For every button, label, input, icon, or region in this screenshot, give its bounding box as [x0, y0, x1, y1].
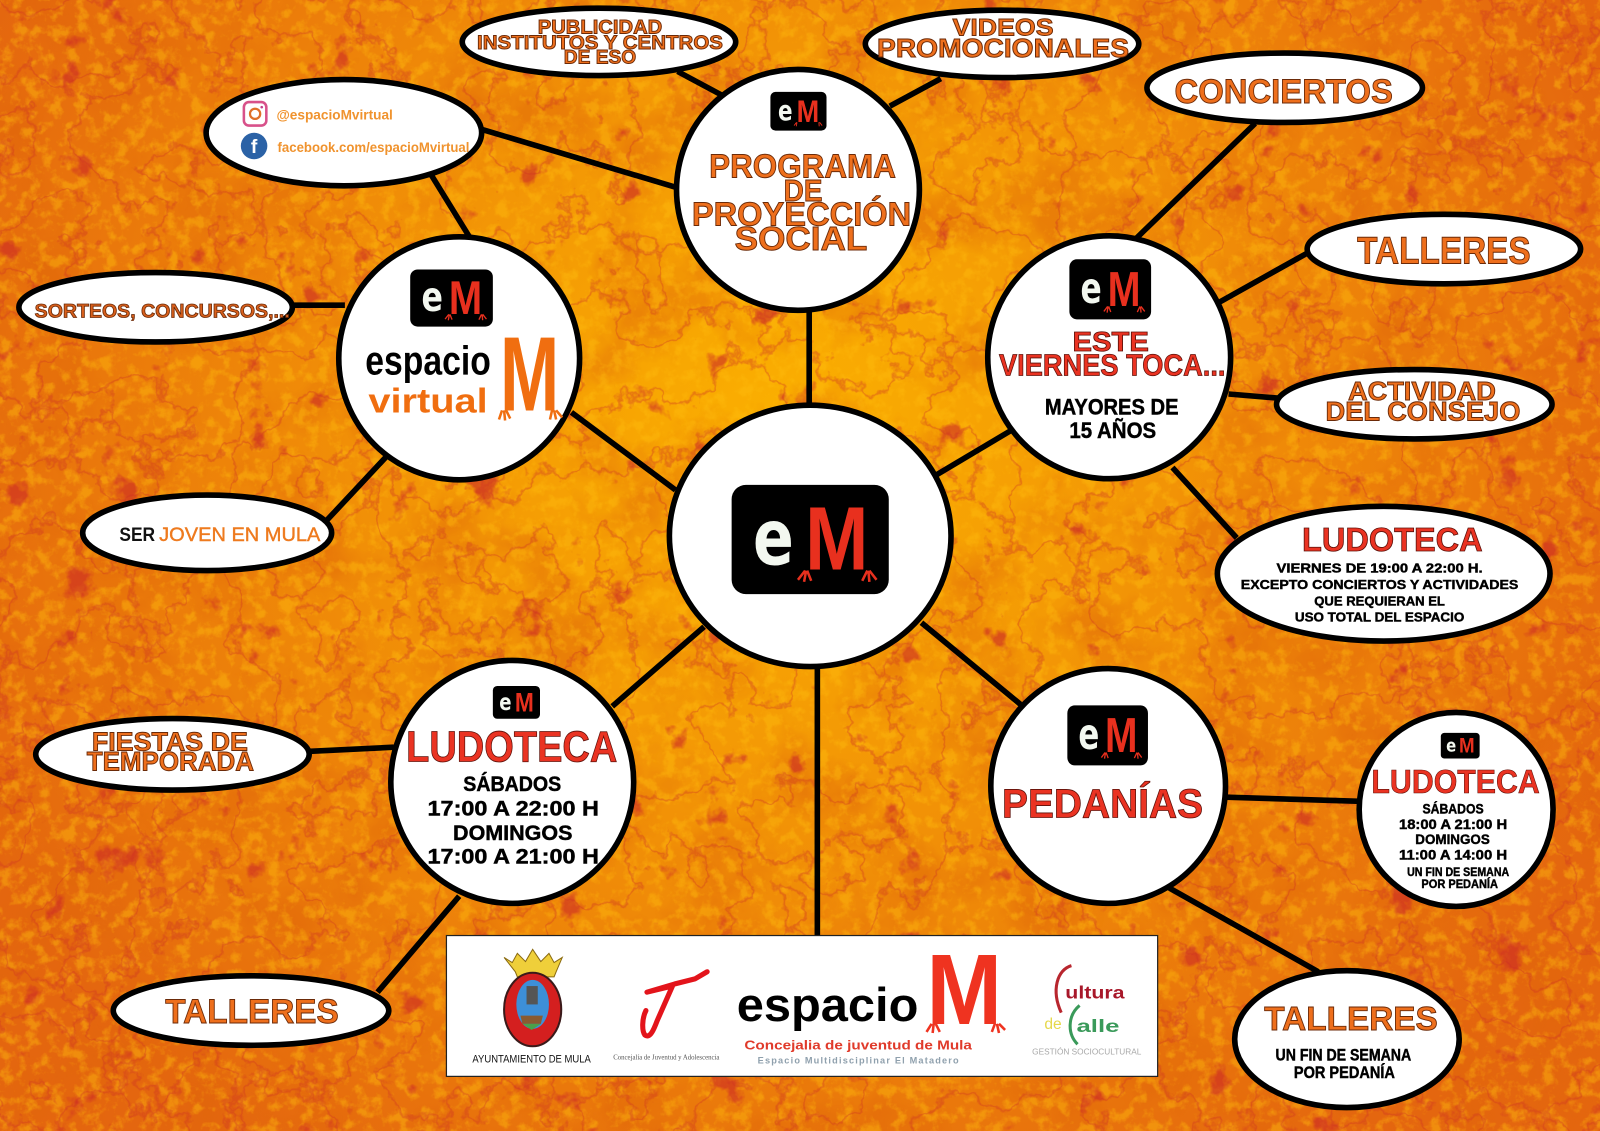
age note: MAYORES DE	[1045, 394, 1179, 419]
title: SOCIAL	[735, 221, 867, 258]
schedule: POR PEDANÍA	[1421, 876, 1498, 891]
logo: eM: e	[753, 493, 794, 583]
logo: eM: M	[1459, 733, 1475, 758]
schedule	[428, 771, 599, 869]
bubble: fiestas de temporada: TEMPORADA	[87, 747, 254, 777]
bubble: conciertos	[1147, 53, 1422, 122]
icon: red J	[643, 972, 707, 1036]
logo: eM	[410, 269, 493, 327]
schedule: UN FIN DE SEMANA	[1407, 865, 1509, 879]
logo: eM: e	[1081, 263, 1102, 313]
bubble: videos promocionales: VIDEOS	[953, 15, 1054, 42]
schedule: DOMINGOS	[1415, 832, 1490, 848]
bubble: talleres bottom left: TALLERES	[165, 993, 339, 1031]
wordmark: M: M	[500, 315, 559, 433]
title: VIERNES TOCA...	[999, 349, 1226, 383]
node: ludoteca	[391, 660, 634, 903]
title: ESTE	[1072, 326, 1149, 357]
line: ludoteca to fiestas	[310, 747, 394, 751]
title	[692, 149, 911, 258]
title: PROYECCIÓN	[692, 196, 911, 234]
title	[999, 326, 1226, 383]
logo: eM	[493, 686, 540, 719]
bubble: talleres pedanias	[1235, 971, 1459, 1108]
schedule: EXCEPTO CONCIERTOS Y ACTIVIDADES	[1241, 577, 1519, 592]
wordmark: espacio: espacio	[365, 338, 491, 384]
bubble: sorteos: SORTEOS, CONCURSOS,...	[35, 300, 290, 322]
schedule: 18:00 A 21:00 H	[1399, 817, 1507, 833]
line: centre to pedanias	[921, 623, 1020, 704]
schedule: QUE REQUIERAN EL	[1314, 593, 1445, 608]
bubble: publicidad	[462, 8, 736, 76]
wordmark: espacio M: M	[927, 934, 1002, 1046]
note	[1276, 1047, 1411, 1082]
logo: eM	[770, 92, 827, 131]
age note: 15 AÑOS	[1069, 418, 1156, 443]
bubble: talleres top right: TALLERES	[1357, 230, 1531, 272]
line: viernes to conciertos	[1137, 124, 1255, 238]
bubble: ser joven en mula	[83, 495, 332, 571]
schedule: SÁBADOS	[1422, 801, 1484, 818]
bubble: publicidad: INSTITUTOS Y CENTROS	[477, 32, 723, 54]
logo: cultura de calle: alle	[1077, 1016, 1120, 1036]
icon: facebook: f	[251, 136, 258, 158]
bubble: ludoteca viernes: LUDOTECA	[1302, 522, 1483, 559]
bubble: actividad del consejo: DEL CONSEJO	[1326, 397, 1520, 427]
schedule	[1241, 561, 1519, 625]
wordmark: espacio M	[737, 934, 1005, 1046]
facebook address: facebook.com/espacioMvirtual	[278, 140, 469, 156]
logo: eM: M	[1108, 262, 1140, 317]
line: virtual to social networks	[432, 176, 469, 237]
instagram handle: @espacioMvirtual	[277, 107, 393, 123]
logo: eM: e	[778, 94, 793, 127]
note: POR PEDANÍA	[1294, 1063, 1395, 1082]
bubble: videos promocionales: PROMOCIONALES	[877, 35, 1129, 63]
bubble: ludoteca viernes	[1217, 506, 1550, 641]
bubble: actividad del consejo: ACTIVIDAD	[1348, 378, 1496, 406]
bubble: videos promocionales	[865, 10, 1139, 78]
note: UN FIN DE SEMANA	[1276, 1047, 1411, 1065]
line: viernes to actividad	[1229, 394, 1278, 398]
logo: eM: e	[421, 273, 443, 321]
logo: cultura de calle: ultura	[1065, 982, 1125, 1002]
bubble: talleres top right	[1307, 214, 1581, 284]
wordmark: virtual: virtual	[368, 382, 488, 420]
node: este viernes toca	[988, 236, 1231, 479]
schedule: 17:00 A 21:00 H	[428, 845, 599, 869]
line: centre to programa	[806, 310, 812, 405]
line: ludoteca to talleres	[378, 896, 459, 992]
line: programa to publicidad	[678, 71, 721, 95]
subtitle: concejalia de juventud: Concejalia de juventud de Mula	[744, 1037, 973, 1052]
bubble: publicidad: PUBLICIDAD	[538, 17, 662, 39]
age note	[1045, 394, 1179, 443]
schedule: SÁBADOS	[463, 771, 561, 796]
title: PROGRAMA	[709, 149, 896, 186]
logo: eM	[1067, 705, 1148, 765]
line: virtual to sorteos	[294, 302, 345, 308]
node: programa de proyeccion social	[677, 69, 919, 310]
line: centre to ludoteca	[612, 627, 704, 706]
bubble: ser joven en mula: JOVEN EN MULA	[159, 524, 320, 546]
icon: instagram	[244, 102, 266, 126]
subtitle: espacio multidisciplinar: Espacio Multidisciplinar El Matadero	[758, 1056, 959, 1066]
caption: ayuntamiento: AYUNTAMIENTO DE MULA	[472, 1054, 592, 1066]
node: ludoteca pedanias	[1359, 712, 1553, 906]
node: espacio virtual	[339, 237, 580, 480]
icon: facebook	[241, 133, 267, 159]
logo: eM: M	[1105, 708, 1137, 763]
schedule: 11:00 A 14:00 H	[1399, 847, 1507, 863]
logo: eM	[732, 485, 889, 594]
schedule: USO TOTAL DEL ESPACIO	[1295, 610, 1464, 625]
logo: cultura de calle: GESTIÓN SOCIOCULTURAL	[1032, 1046, 1142, 1056]
line: centre to sponsors	[815, 668, 820, 936]
wordmark: espacio M: espacio	[737, 979, 918, 1031]
bubble: ser joven en mula: SER	[119, 524, 155, 546]
logo: eM: e	[1078, 710, 1099, 759]
logo: cultura de calle	[1032, 966, 1142, 1056]
schedule	[1399, 801, 1509, 891]
line: centre to espacio virtual	[571, 412, 676, 490]
bubble: talleres pedanias: TALLERES	[1264, 1001, 1438, 1038]
logo: eM: M	[805, 490, 868, 590]
line: pedanias to ludoteca	[1227, 797, 1360, 801]
node: pedanias	[991, 669, 1226, 903]
title: LUDOTECA	[1371, 764, 1540, 801]
title: DE	[784, 174, 822, 208]
bubble: social networks	[206, 80, 482, 186]
connector lines	[294, 71, 1360, 992]
line: virtual to ser joven	[327, 457, 386, 521]
schedule: DOMINGOS	[453, 821, 572, 845]
line: centre to viernes	[937, 430, 1012, 475]
bubble: fiestas de temporada: FIESTAS DE	[92, 728, 248, 756]
panel: sponsors	[446, 934, 1158, 1076]
line: viernes to ludoteca	[1172, 468, 1237, 538]
logo: eM	[1069, 259, 1151, 319]
line: viernes to talleres	[1219, 253, 1307, 302]
bubble: publicidad: DE ESO	[564, 46, 636, 68]
schedule: VIERNES DE 19:00 A 22:00 H.	[1277, 561, 1483, 576]
line: programa to videos	[890, 79, 941, 106]
logo: eM: M	[515, 687, 534, 717]
logo: eM	[1441, 733, 1480, 758]
bubble: talleres bottom left	[113, 976, 389, 1045]
bubble: actividad del consejo	[1277, 370, 1552, 439]
bubble: conciertos: CONCIERTOS	[1174, 73, 1393, 111]
caption: concejalia: Concejalía de Juventud y Adolescencia	[613, 1054, 720, 1062]
line: pedanias to talleres	[1169, 888, 1318, 972]
logo: eM: M	[797, 93, 819, 129]
icon: coat of arms of Mula	[504, 949, 562, 1046]
logo: eM: e	[1446, 736, 1456, 756]
line: programa to social networks	[483, 130, 678, 188]
title: PEDANÍAS	[1002, 781, 1203, 827]
logo: cultura de calle: de	[1044, 1016, 1062, 1033]
node: centre	[669, 405, 951, 667]
bubble: fiestas de temporada	[36, 719, 309, 790]
bubble: sorteos	[19, 273, 292, 342]
logo: eM: e	[499, 689, 512, 716]
logo: eM: M	[449, 271, 482, 324]
title: LUDOTECA	[406, 722, 617, 771]
schedule: 17:00 A 22:00 H	[428, 797, 599, 821]
